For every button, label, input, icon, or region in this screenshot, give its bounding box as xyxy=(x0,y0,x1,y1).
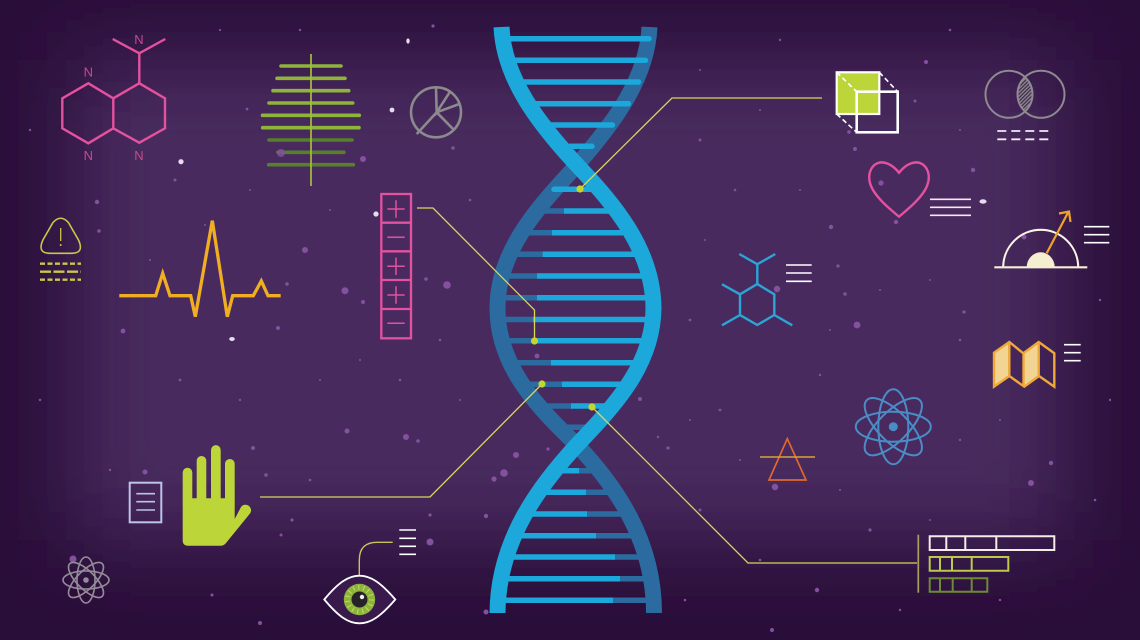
icon: pink molecule xyxy=(62,32,165,163)
connector: hand to helix xyxy=(260,384,542,497)
icon: pie chart xyxy=(411,87,461,137)
strand: dark xyxy=(498,27,654,613)
icon: pink molecule: N xyxy=(84,148,93,163)
rungs: dark halves xyxy=(505,211,647,600)
connector: cube to helix xyxy=(580,98,822,189)
icon: green bar tree xyxy=(262,54,359,186)
icon: blue atom xyxy=(856,389,931,464)
icon: gauge xyxy=(994,212,1109,267)
icon: pink molecule: N xyxy=(134,148,144,163)
icon: heart xyxy=(869,162,971,217)
icon: hand xyxy=(183,445,251,546)
icon: cube xyxy=(837,72,898,132)
DNA double helix xyxy=(498,27,654,613)
strand: light xyxy=(498,27,654,613)
connector: plus-minus column to helix xyxy=(417,208,534,341)
icon: small grey atom xyxy=(63,557,109,603)
icon: folded map xyxy=(994,342,1081,387)
icon: blue molecule xyxy=(722,254,812,325)
icon: pink molecule: N xyxy=(134,32,144,47)
icon: document xyxy=(130,483,161,522)
connector: bars to helix xyxy=(592,407,917,563)
icon: heartbeat line xyxy=(119,221,281,317)
white speckles xyxy=(178,38,987,341)
connector dots xyxy=(531,185,596,411)
icon: warning triangle xyxy=(40,218,81,280)
icon: pink molecule: N xyxy=(84,64,93,80)
icon: venn diagram xyxy=(986,71,1064,139)
icon: segmented bars xyxy=(918,535,1054,593)
icon: eye xyxy=(324,530,416,623)
icon: triangle symbol xyxy=(760,439,815,480)
icon: plus minus column xyxy=(381,194,411,338)
rungs: light halves xyxy=(505,39,649,600)
